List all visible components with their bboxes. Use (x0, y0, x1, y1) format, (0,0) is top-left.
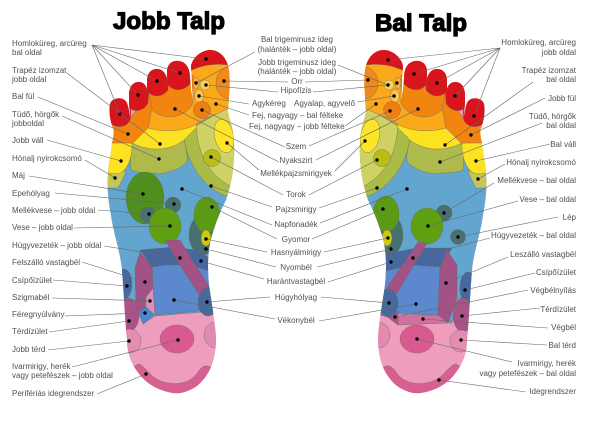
label: Jobb térd (12, 339, 131, 354)
label: Térdízület jobb (12, 319, 131, 336)
label: Ivarmirigy jobb oldal: vagy petefészek – jobb oldal (12, 371, 113, 380)
label: Húgyvezeték bal oldal: Húgyvezeték – bal oldal (491, 231, 576, 240)
label: Tüdő, hörgők jobboldal: Tüdő, hörgők (12, 110, 60, 119)
label: Hónalj nyirokcsomó bal (476, 158, 577, 181)
label: Tüdő, hörgők bal oldal: bal oldal (546, 121, 576, 130)
label: Ivarmirigy bal oldal: Ivarmirigy, herék (517, 359, 577, 368)
label: Mellékpajzsmirigyek: Mellékpajzsmirigyek (260, 169, 333, 178)
label: Fej, nagyagy bal félteke: Fej, nagyagy – bal félteke (252, 111, 344, 120)
label: Trapéz izomzat bal oldal: Trapéz izomzat (522, 66, 577, 75)
label: Lép: Lép (563, 213, 577, 222)
label: Nyakszirt: Nyakszirt (280, 156, 313, 165)
label: Tüdő, hörgők bal oldal (438, 112, 577, 164)
label: Szem (200, 108, 392, 151)
label: Vékonybél: Vékonybél (277, 316, 315, 325)
label: Bal trigeminusz ideg (194, 35, 337, 85)
label: Jobb fül (469, 94, 576, 137)
label: Hasnyálmirigy (204, 236, 390, 257)
label: Gyomor (210, 205, 385, 244)
right foot organs (116, 172, 220, 353)
label: Idegrendszer (437, 378, 576, 396)
label: Ivarmirigy jobb oldal (12, 338, 180, 380)
label: Mellékvese jobb oldal (12, 206, 151, 216)
label: Ivarmirigy bal oldal (415, 337, 577, 378)
label: Vese jobb oldal (12, 223, 172, 232)
label: Fej, nagyagy jobb félteke (249, 102, 378, 131)
label: Hónalj nyirokcsomó jobb: Hónalj nyirokcsomó (12, 154, 82, 163)
label: Tüdő, hörgők bal oldal: Tüdő, hörgők (529, 112, 577, 121)
label: Hipofízis: Hipofízis (281, 86, 311, 95)
label: Mellékvese bal oldal (442, 176, 576, 215)
label: Agyalap, agyvelő: Agyalap, agyvelő (294, 99, 355, 108)
label: Homloküreg bal oldal: bal oldal (12, 48, 42, 57)
label: Vese bal oldal (426, 195, 576, 228)
label: Bal fül (12, 92, 130, 136)
label: Csípőízület bal: Csípőízület (536, 268, 577, 277)
label: Bal váll (474, 140, 576, 163)
label: Napfonadék (180, 187, 409, 229)
label: Féregnyúlvány (12, 310, 147, 319)
label: Trapéz izomzat jobb oldal: jobb oldal (11, 75, 46, 84)
label: Térdízület jobb: Térdízület (12, 327, 48, 336)
label: Gyomor: Gyomor (282, 235, 311, 244)
label: Végbélnyílás: Végbélnyílás (530, 286, 576, 295)
label: Húgyvezeték jobb oldal: Húgyvezeték – jobb oldal (12, 241, 102, 250)
label: Perifériás idegrendszer (12, 372, 148, 398)
label: Jobb trigeminusz ideg (258, 58, 399, 85)
label: Perifériás idegrendszer: Perifériás idegrendszer (12, 389, 95, 398)
label: Végbél (421, 317, 576, 332)
label: Jobb trigeminusz ideg: (halánték – jobb oldal) (258, 67, 337, 76)
label: Trapéz izomzat jobb oldal (11, 66, 162, 146)
label: Homloküreg jobb oldal (386, 38, 576, 118)
label: Epehólyag (12, 189, 176, 206)
label: Harántvastagbél: Harántvastagbél (267, 277, 325, 286)
label: Bal trigeminusz ideg: (halánték – jobb oldal) (258, 45, 337, 54)
label: Jobb térd: Jobb térd (12, 345, 45, 354)
label: Bal fül: Bal fül (12, 92, 34, 101)
label: Nyombél (204, 247, 393, 272)
label: Ivarmirigy bal oldal: vagy petefészek – bal oldal (479, 369, 576, 378)
label: Fej, nagyagy jobb félteke: Fej, nagyagy – jobb félteke (249, 122, 345, 131)
label: Leszálló vastagbél: Leszálló vastagbél (510, 250, 576, 259)
label: Torok: Torok (286, 190, 307, 199)
title: Bal Talp: Bal Talp (375, 10, 467, 37)
label: Felszálló vastagbél: Felszálló vastagbél (12, 258, 80, 267)
label: Máj: Máj (12, 171, 25, 180)
label: Trapéz izomzat bal oldal: bal oldal (546, 75, 576, 84)
label: Bal térd: Bal térd (548, 341, 576, 350)
label: Jobb váll (12, 136, 123, 163)
label: Leszálló vastagbél (444, 250, 576, 285)
label: Nyombél: Nyombél (280, 263, 312, 272)
label: Húgyhólyag: Húgyhólyag (275, 293, 317, 302)
label: Tüdő, hörgők jobboldal (11, 110, 161, 161)
label: Csípőízület jobb: Csípőízület (12, 276, 53, 285)
label: Torok (209, 155, 379, 199)
label: Hónalj nyirokcsomó bal: Hónalj nyirokcsomó (506, 158, 577, 167)
label: Féregnyúlvány: Féregnyúlvány (12, 310, 64, 319)
label: Vese jobb oldal: Vese – jobb oldal (12, 223, 73, 232)
label: Mellékvese jobb oldal: Mellékvese – jobb oldal (12, 206, 95, 215)
label: Végbél: Végbél (551, 323, 576, 332)
label: Szigmabél: Szigmabél (12, 293, 50, 302)
label: Térdízület bal (460, 305, 577, 318)
label: Epehólyag: Epehólyag (12, 189, 50, 198)
label: Pajzsmirigy: Pajzsmirigy (276, 205, 316, 214)
label: Trapéz izomzat jobb oldal: Trapéz izomzat (12, 66, 67, 75)
label: Orr (222, 77, 370, 86)
label: Lép (456, 213, 577, 239)
label: Ivarmirigy jobb oldal: Ivarmirigy, herék (12, 362, 72, 371)
label: Jobb fül: Jobb fül (548, 94, 576, 103)
label: Térdízület bal: Térdízület (540, 305, 577, 314)
left foot organs (373, 196, 476, 352)
label: Vese bal oldal: Vese – bal oldal (520, 195, 576, 204)
label: Agyalap, agyvelő (294, 94, 396, 108)
label: Csípőízület bal (463, 268, 577, 292)
title: Jobb Talp: Jobb Talp (113, 8, 225, 35)
label: Pajzsmirigy (209, 184, 379, 214)
label: Homloküreg jobb oldal: Homloküreg, arcüreg (501, 38, 576, 47)
label: Felszálló vastagbél (12, 258, 147, 284)
label: Jobb trigeminusz ideg: Jobb trigeminusz ideg (258, 58, 336, 67)
foot base colour zones (100, 40, 242, 400)
label: Napfonadék: Napfonadék (274, 220, 319, 229)
label: Mellékpajzsmirigyek (225, 139, 367, 178)
label: Agykéreg: Agykéreg (252, 99, 286, 108)
label: Bal trigeminusz ideg: Bal trigeminusz ideg (261, 35, 333, 44)
label: Húgyvezeték bal oldal (411, 231, 576, 260)
label: Hasnyálmirigy: Hasnyálmirigy (271, 248, 321, 257)
label: Agykéreg (197, 94, 286, 108)
label: Mellékvese bal oldal: Mellékvese – bal oldal (497, 176, 576, 185)
label: Végbélnyílás (393, 286, 576, 319)
label: Bal váll: Bal váll (550, 140, 576, 149)
label: Szem: Szem (286, 142, 307, 151)
label: Nyakszirt (173, 107, 420, 165)
label: Máj (12, 171, 145, 196)
label: Fej, nagyagy bal félteke (214, 102, 344, 120)
label: Jobb váll: Jobb váll (12, 136, 44, 145)
label: Bal térd (459, 338, 576, 350)
label: Húgyvezeték jobb oldal (12, 241, 182, 260)
mirrored base colour zones (352, 40, 494, 400)
label: Vékonybél (172, 298, 418, 325)
panel: left foot sole (360, 50, 486, 394)
label: Idegrendszer: Idegrendszer (529, 387, 576, 396)
label: Homloküreg jobb oldal: jobb oldal (541, 48, 576, 57)
label: Szigmabél (12, 293, 152, 303)
panel: right foot sole (108, 50, 234, 394)
label: Hipofízis (204, 83, 390, 95)
label: Húgyhólyag (205, 293, 391, 305)
label: Homloküreg bal oldal: Homloküreg, arcüreg (12, 39, 87, 48)
label: Harántvastagbél (199, 259, 393, 286)
label: Hónalj nyirokcsomó jobb (12, 154, 117, 180)
label: Trapéz izomzat bal oldal (443, 66, 577, 147)
label: Orr: Orr (291, 77, 303, 86)
label: Homloküreg bal oldal (12, 39, 208, 116)
label: Csípőízület jobb (12, 276, 129, 288)
label: Tüdő, hörgők jobboldal: jobboldal (11, 119, 44, 128)
